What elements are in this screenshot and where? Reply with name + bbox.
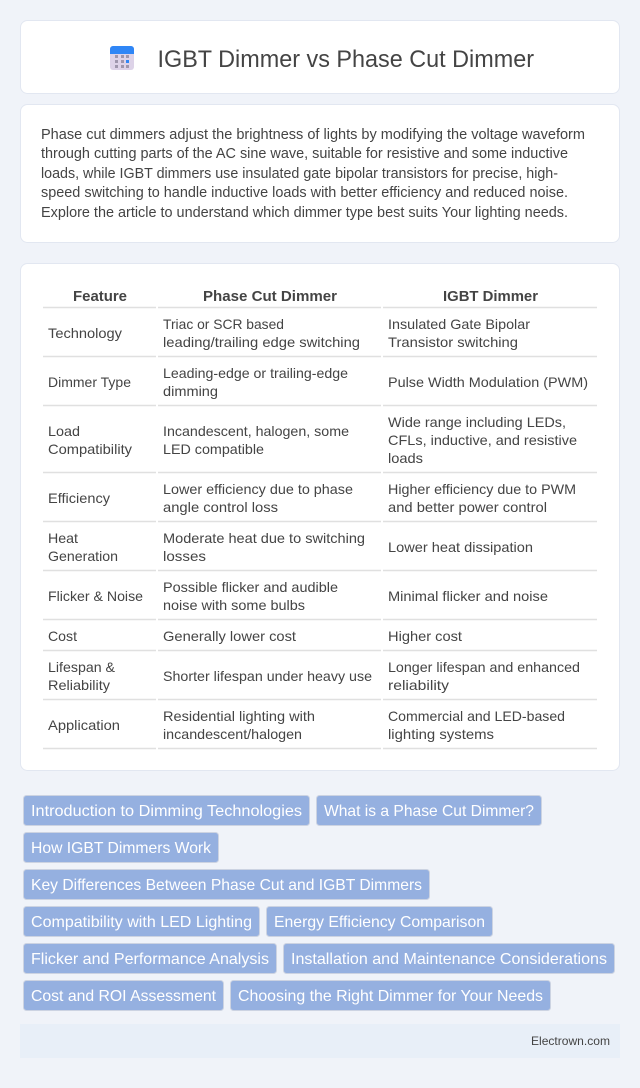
topic tags <box>24 796 614 1010</box>
row: dimmer type: Pulse Width Modulation (PWM) <box>388 374 588 390</box>
row: dimmer type: Dimmer Type <box>48 374 131 390</box>
row: lifespan and reliability: Reliability <box>48 677 110 693</box>
tag: introduction <box>24 796 310 826</box>
row: efficiency: angle control loss <box>163 499 278 515</box>
row: load compatibility <box>48 414 577 466</box>
footer: Electrown.com <box>531 1034 610 1048</box>
tag: phase cut: What is a Phase Cut Dimmer? <box>324 803 534 820</box>
tag: introduction: Introduction to Dimming Technologies <box>31 803 302 820</box>
tag: cost and roi <box>24 980 224 1010</box>
row: load compatibility: LED compatible <box>163 441 264 457</box>
row: application: Residential lighting with <box>163 708 315 724</box>
row: load compatibility: CFLs, inductive, and resistive <box>388 432 577 448</box>
row: load compatibility: loads <box>388 450 423 466</box>
row: technology: Technology <box>48 325 122 341</box>
tag: phase cut <box>316 796 542 826</box>
tag: how igbt works <box>24 832 218 862</box>
tag: led compatibility: Compatibility with LED Lighting <box>31 914 252 931</box>
row: flicker and noise: noise with some bulbs <box>163 597 305 613</box>
row: flicker and noise: Flicker & Noise <box>48 588 143 604</box>
title: IGBT Dimmer vs Phase Cut Dimmer <box>158 46 534 73</box>
tag: energy efficiency: Energy Efficiency Comparison <box>274 914 485 931</box>
tag: how igbt works: How IGBT Dimmers Work <box>31 840 212 857</box>
description text: loads, while IGBT dimmers use insulated gate bipolar transistors for precise, high- <box>41 166 558 182</box>
row: heat generation: losses <box>163 548 206 564</box>
row: cost: Cost <box>48 628 77 644</box>
table header <box>73 289 538 305</box>
description text: through cutting parts of the AC sine wave, suitable for resistive and some inductive <box>41 146 568 162</box>
row: efficiency: Higher efficiency due to PWM <box>388 481 576 497</box>
row: lifespan and reliability: Longer lifespan and enhanced <box>388 659 580 675</box>
row: efficiency <box>48 481 576 515</box>
description text: speed switching to handle inductive loads with better efficiency and reduced noise. <box>41 185 568 201</box>
row: lifespan and reliability: reliability <box>388 677 449 693</box>
row: dimmer type: Leading-edge or trailing-edge <box>163 365 348 381</box>
table header: Phase Cut Dimmer <box>203 289 337 305</box>
row: efficiency: Lower efficiency due to phase <box>163 481 353 497</box>
table header: Feature <box>73 289 127 305</box>
row: flicker and noise <box>48 579 548 613</box>
tag: key differences: Key Differences Between Phase Cut and IGBT Dimmers <box>31 877 422 894</box>
panel: comparison table <box>20 264 620 770</box>
row: heat generation <box>48 530 533 564</box>
row: cost: Generally lower cost <box>163 628 296 644</box>
header panel <box>20 20 620 94</box>
row: load compatibility: Wide range including LEDs, <box>388 414 566 430</box>
row: efficiency: and better power control <box>388 499 547 515</box>
row: application: Commercial and LED-based <box>388 708 565 724</box>
row: cost <box>48 628 462 644</box>
row: flicker and noise: Minimal flicker and noise <box>388 588 548 604</box>
row: heat generation: Lower heat dissipation <box>388 539 533 555</box>
row: application: Application <box>48 717 120 733</box>
row: technology: Insulated Gate Bipolar <box>388 316 530 332</box>
icon: calendar <box>110 46 134 70</box>
row: technology: Triac or SCR based <box>163 316 284 332</box>
tag: led compatibility <box>24 906 260 936</box>
row: efficiency: Efficiency <box>48 490 110 506</box>
row: application: incandescent/halogen <box>163 726 302 742</box>
row: lifespan and reliability: Lifespan & <box>48 659 116 675</box>
panel: description <box>20 104 620 242</box>
row: load compatibility: Incandescent, halogen, some <box>163 423 349 439</box>
row: flicker and noise: Possible flicker and audible <box>163 579 338 595</box>
description text: Phase cut dimmers adjust the brightness of lights by modifying the voltage waveform <box>41 127 585 143</box>
row: heat generation: Generation <box>48 548 118 564</box>
row: technology <box>48 316 530 350</box>
footer <box>20 1024 620 1058</box>
row: technology: Transistor switching <box>388 334 518 350</box>
tag: choosing <box>230 980 550 1010</box>
tag: installation <box>284 944 614 974</box>
row: cost: Higher cost <box>388 628 462 644</box>
tag: cost and roi: Cost and ROI Assessment <box>31 988 217 1005</box>
table header: IGBT Dimmer <box>443 289 538 305</box>
row: heat generation: Moderate heat due to switching <box>163 530 365 546</box>
tag: flicker <box>24 944 276 974</box>
row: lifespan and reliability: Shorter lifespan under heavy use <box>163 668 372 684</box>
row: application: lighting systems <box>388 726 494 742</box>
row: dimmer type <box>48 365 588 399</box>
tag: flicker: Flicker and Performance Analysis <box>31 951 269 968</box>
row: load compatibility: Compatibility <box>48 441 132 457</box>
tag: installation: Installation and Maintenance Considerations <box>291 951 607 968</box>
row: dimmer type: dimming <box>163 383 218 399</box>
row: lifespan and reliability <box>48 659 580 693</box>
description text <box>41 127 585 221</box>
row: technology: leading/trailing edge switching <box>163 334 360 350</box>
tag: energy efficiency <box>266 906 492 936</box>
tag: key differences <box>24 870 430 900</box>
row: application <box>48 708 565 742</box>
row: heat generation: Heat <box>48 530 78 546</box>
tag: choosing: Choosing the Right Dimmer for Your Needs <box>238 988 543 1005</box>
row: load compatibility: Load <box>48 423 80 439</box>
description text: Explore the article to understand which dimmer type best suits Your lighting needs. <box>41 205 568 221</box>
